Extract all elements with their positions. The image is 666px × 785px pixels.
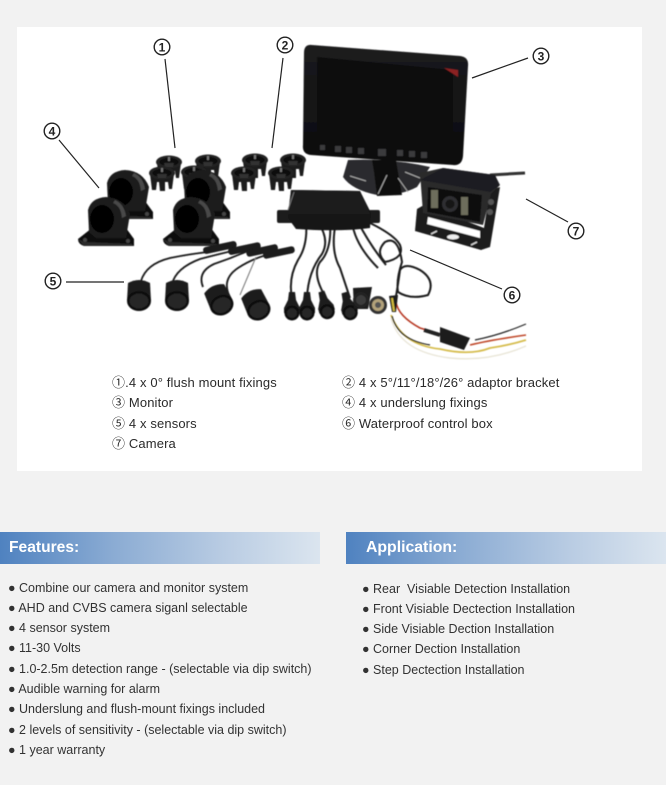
- callout 3: 3: [538, 50, 545, 64]
- application heading bar: Application:: [366, 539, 457, 556]
- monitor stand: [343, 160, 430, 196]
- features heading bar: Features:: [9, 539, 79, 556]
- features list: ● 1 year warranty: [8, 743, 106, 757]
- application list: ● Rear Visiable Detection Installation: [362, 582, 570, 596]
- panel: product kit: [17, 27, 642, 471]
- panel: features: [0, 532, 320, 757]
- callout 6: [410, 250, 520, 303]
- application list: ● Front Visiable Dectection Installation: [362, 602, 575, 616]
- parts legend: ⑥ Waterproof control box: [342, 416, 493, 431]
- metal connectors: [353, 287, 387, 314]
- parts legend: ③ Monitor: [112, 395, 174, 410]
- product photo: kit components: [78, 45, 526, 359]
- sensor plugs by box: [284, 289, 360, 322]
- four sensors: [127, 280, 274, 324]
- features heading bar: [0, 532, 320, 564]
- callout 7: [526, 199, 584, 239]
- callout 1: [154, 39, 175, 148]
- application list: ● Corner Dection Installation: [362, 642, 520, 656]
- panel: application: [346, 532, 666, 677]
- features list: ● Audible warning for alarm: [8, 682, 160, 696]
- callout 2: [272, 37, 293, 148]
- callout 3: [472, 48, 549, 78]
- parts legend: ④ 4 x underslung fixings: [342, 395, 488, 410]
- monitor: [303, 45, 468, 165]
- clips: flush mount fixings: [149, 154, 221, 191]
- control box cables: [291, 222, 431, 298]
- callout 2: 2: [282, 38, 289, 52]
- parts legend: ①.4 x 0° flush mount fixings: [112, 375, 277, 390]
- features list: [8, 581, 312, 757]
- callout 7: 7: [573, 224, 580, 238]
- parts legend: ⑤ 4 x sensors: [112, 416, 197, 431]
- sensor cables: [141, 250, 266, 299]
- application list: ● Step Dectection Installation: [362, 663, 525, 677]
- parts legend: ⑦ Camera: [112, 436, 177, 451]
- callout 5: 5: [50, 274, 57, 288]
- underslung fixings: [78, 170, 230, 246]
- callout 1: 1: [159, 40, 166, 54]
- callout 5: [45, 273, 124, 289]
- features list: ● 1.0-2.5m detection range - (selectable via dip switch): [8, 662, 312, 676]
- sensor connectors: [203, 241, 295, 259]
- parts legend: [112, 375, 560, 451]
- application list: [362, 582, 575, 677]
- waterproof control box: [277, 190, 380, 230]
- features list: ● AHD and CVBS camera siganl selectable: [8, 601, 248, 615]
- features list: ● 4 sensor system: [8, 621, 110, 635]
- parts legend: ② 4 x 5°/11°/18°/26° adaptor bracket: [342, 375, 560, 390]
- callout 4: [44, 123, 99, 188]
- features list: ● Combine our camera and monitor system: [8, 581, 248, 595]
- power wires and fuse holder: [389, 295, 526, 359]
- callout 6: 6: [509, 288, 516, 302]
- features list: ● Underslung and flush-mount fixings included: [8, 702, 265, 716]
- features list: ● 11-30 Volts: [8, 641, 81, 655]
- clips: adaptor brackets: [231, 154, 306, 191]
- features list: ● 2 levels of sensitivity - (selectable via dip switch): [8, 723, 286, 737]
- rear camera: [415, 168, 525, 250]
- application heading bar: [346, 532, 666, 564]
- callout 4: 4: [49, 124, 56, 138]
- application list: ● Side Visiable Dection Installation: [362, 622, 554, 636]
